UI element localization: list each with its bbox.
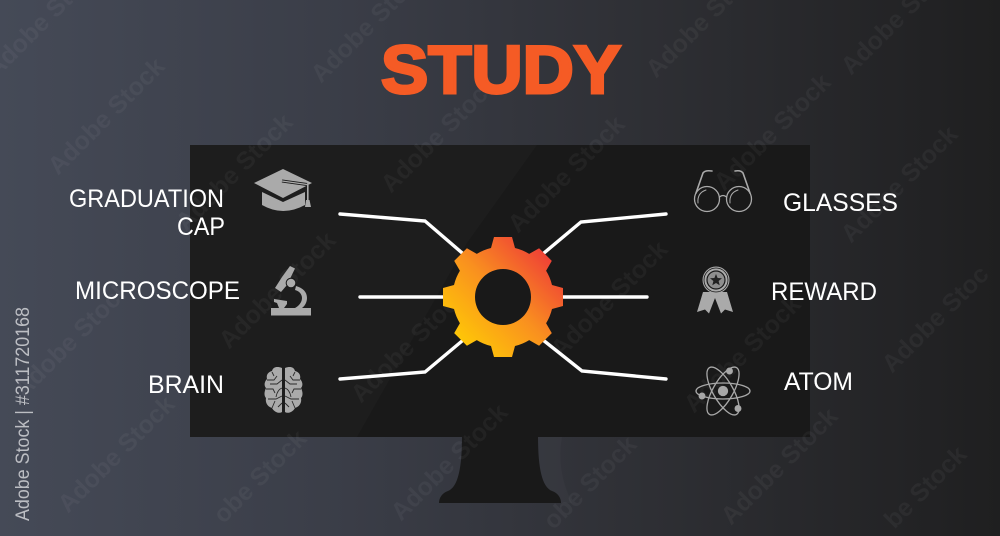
icon: atom <box>696 363 750 419</box>
watermarks: Adobe Stock <box>213 226 341 354</box>
watermarks: Adobe Stock <box>835 120 963 248</box>
watermarks: Adobe Stock <box>345 280 473 408</box>
stock id: Adobe Stock | #311720168 <box>13 307 34 521</box>
label: graduation cap <box>69 185 225 241</box>
watermarks: Adobe Stock <box>502 110 630 238</box>
watermarks: Adobe Stock <box>385 398 513 526</box>
labels <box>69 185 898 399</box>
watermarks: Adobe Stock <box>545 235 673 363</box>
icon: graduation cap <box>254 169 312 211</box>
icon: reward <box>697 266 733 314</box>
title: STUDY <box>381 32 621 108</box>
monitor <box>190 145 810 503</box>
watermarks: Adobe Stock <box>42 52 170 180</box>
connector lines <box>340 214 666 379</box>
label: microscope: MICROSCOPE <box>75 277 240 305</box>
line: graduation cap <box>340 214 468 258</box>
watermarks: obe Stock <box>538 430 642 535</box>
stand highlight <box>538 437 572 503</box>
watermarks: Adobe Stock <box>8 275 136 403</box>
icon: microscope <box>271 266 311 316</box>
watermarks: be Stock <box>879 440 972 534</box>
icon: glasses <box>694 171 752 212</box>
line: brain <box>340 336 468 379</box>
watermarks: Adobe Stock <box>52 390 180 518</box>
label: atom: ATOM <box>784 368 853 396</box>
watermarks: Adobe Stock <box>715 402 843 530</box>
watermarks: Adobe Stock <box>708 68 836 196</box>
screen reflection <box>190 145 537 437</box>
line: atom <box>538 336 666 379</box>
gear <box>443 237 563 357</box>
monitor stand <box>439 437 561 503</box>
line: glasses <box>538 214 666 258</box>
watermarks: Adobe Stock <box>170 108 298 236</box>
watermarks: obe Stock <box>208 424 312 529</box>
label: reward: REWARD <box>771 278 877 306</box>
line: microscope <box>360 295 450 299</box>
label: graduation cap: GRADUATION <box>69 185 224 213</box>
label: glasses: GLASSES <box>783 189 898 217</box>
line: reward <box>556 295 647 299</box>
watermarks: Adobe Stoc <box>876 260 995 378</box>
watermarks: Adobe Stock <box>375 70 503 198</box>
label: brain: BRAIN <box>148 371 224 399</box>
icon: brain <box>264 367 302 413</box>
watermarks: Adobe Stock <box>678 290 806 418</box>
label: graduation cap: CAP <box>177 213 225 241</box>
monitor screen <box>190 145 810 437</box>
